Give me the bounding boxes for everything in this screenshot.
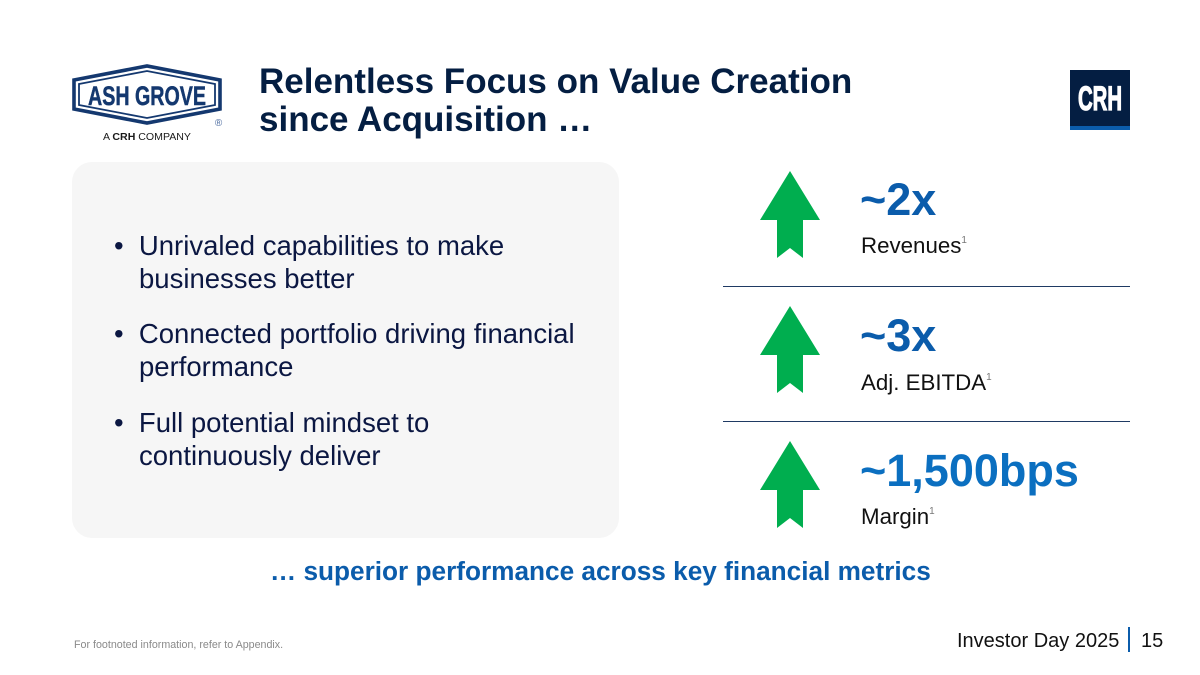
- footer: page number: 15: [1141, 630, 1163, 652]
- bullet: mindset: continuously deliver: [139, 440, 381, 471]
- metric: margin value: ~1,500bps: [860, 445, 1079, 496]
- conclusion statement: … superior performance across key financial metrics: [270, 556, 931, 586]
- title: [259, 62, 852, 139]
- footnote: For footnoted information, refer to Appendix.: [74, 639, 283, 651]
- icon: up arrow EBITDA: [760, 306, 820, 393]
- logo: CRH: [1070, 70, 1130, 130]
- metric: revenues label: Revenues1: [861, 233, 967, 258]
- bullet: mindset: [114, 407, 429, 471]
- metric: EBITDA label: Adj. EBITDA1: [861, 370, 992, 395]
- panel: capabilities: [72, 162, 619, 538]
- icon: up arrow margin: [760, 441, 820, 528]
- bullet: mindset: • Full potential mindset to: [114, 407, 429, 438]
- bullet: capabilities: • Unrivaled capabilities to make: [114, 230, 504, 261]
- footer: event name: Investor Day 2025: [957, 630, 1119, 652]
- metric: EBITDA value: ~3x: [860, 310, 936, 361]
- logo: Ash Grove: [72, 64, 223, 143]
- bullet: portfolio: [114, 318, 575, 382]
- icon: up arrow revenues: [760, 171, 820, 258]
- bullet: portfolio: performance: [139, 351, 293, 382]
- title: Relentless Focus on Value Creation: [259, 62, 852, 101]
- footer: divider: [1128, 627, 1130, 652]
- logo: Ash Grove: A CRH COMPANY: [103, 131, 191, 143]
- metric: margin label: Margin1: [861, 504, 935, 529]
- logo: Ash Grove: ®: [215, 118, 223, 129]
- metric: revenues value: ~2x: [860, 174, 936, 225]
- bullet: capabilities: [114, 230, 504, 294]
- bullet: portfolio: • Connected portfolio driving financial: [114, 318, 575, 349]
- bullet: capabilities: businesses better: [139, 263, 355, 294]
- title: since Acquisition …: [259, 100, 592, 139]
